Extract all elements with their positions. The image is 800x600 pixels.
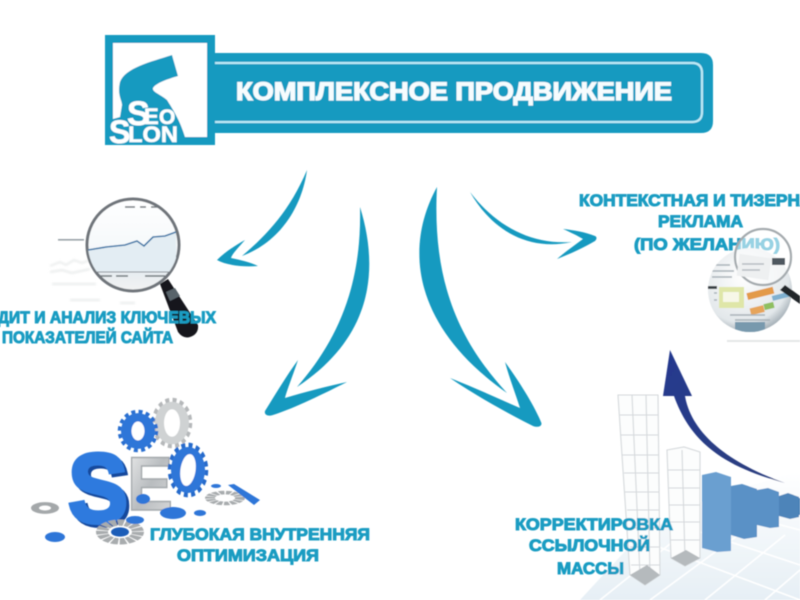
label: link mass correction: ССЫЛОЧНОЙ [529, 536, 650, 555]
dark blue growth arrow [663, 350, 785, 483]
label: deep optimisation: ОПТИМИЗАЦИЯ [177, 546, 319, 565]
logo: Seo Slon: S [109, 114, 130, 150]
gear: silver top [154, 400, 190, 446]
label: link mass correction [515, 515, 673, 578]
arrow: to site audit [217, 170, 307, 266]
label: contextual advertising [579, 191, 800, 254]
glass column tall [618, 395, 660, 585]
arrow: to contextual advertising [470, 192, 596, 259]
chart floor [580, 470, 800, 600]
magnifier handle [780, 285, 800, 304]
logo: Seo Slon: S [127, 95, 150, 133]
title text: КОМПЛЕКСНОЕ ПРОДВИЖЕНИЕ [236, 78, 672, 106]
letter E: E [127, 442, 173, 527]
logo: Seo Slon: O [159, 106, 175, 129]
label: site audit [0, 308, 217, 347]
icon: magnifier over analytics chart [50, 199, 198, 337]
small gears [35, 484, 260, 542]
arrow: to deep optimisation [265, 207, 369, 416]
magnifier handle [160, 279, 198, 337]
arrow: to link mass correction [419, 187, 541, 427]
icon: SEO with gears: S [68, 433, 128, 543]
label: contextual advertising: (ПО ЖЕЛАНИЮ) [634, 235, 780, 254]
label: contextual advertising: РЕКЛАМА [658, 212, 743, 231]
icon: SEO with gears [35, 400, 260, 546]
label: link mass correction: КОРРЕКТИРОВКА [515, 515, 673, 534]
header: logo and title banner [105, 35, 713, 150]
icon: globe of ads with magnifier [708, 229, 800, 342]
letter S: S [71, 436, 131, 546]
glass column short [667, 447, 700, 566]
blue bars [702, 472, 800, 552]
label: deep optimisation: ГЛУБОКАЯ ВНУТРЕННЯЯ [150, 525, 370, 544]
label: deep optimisation [150, 525, 370, 565]
gear: blue letter O [170, 445, 206, 495]
logo: Seo Slon [105, 35, 215, 150]
label: site audit: ПОКАЗАТЕЛЕЙ САЙТА [2, 328, 173, 347]
label: link mass correction: МАССЫ [557, 559, 624, 578]
chart: growth bars [580, 350, 800, 600]
title banner [213, 53, 713, 133]
gear: blue top [120, 412, 156, 450]
logo: Seo Slon: LON [128, 122, 178, 147]
logo: Seo Slon: E [144, 104, 159, 129]
